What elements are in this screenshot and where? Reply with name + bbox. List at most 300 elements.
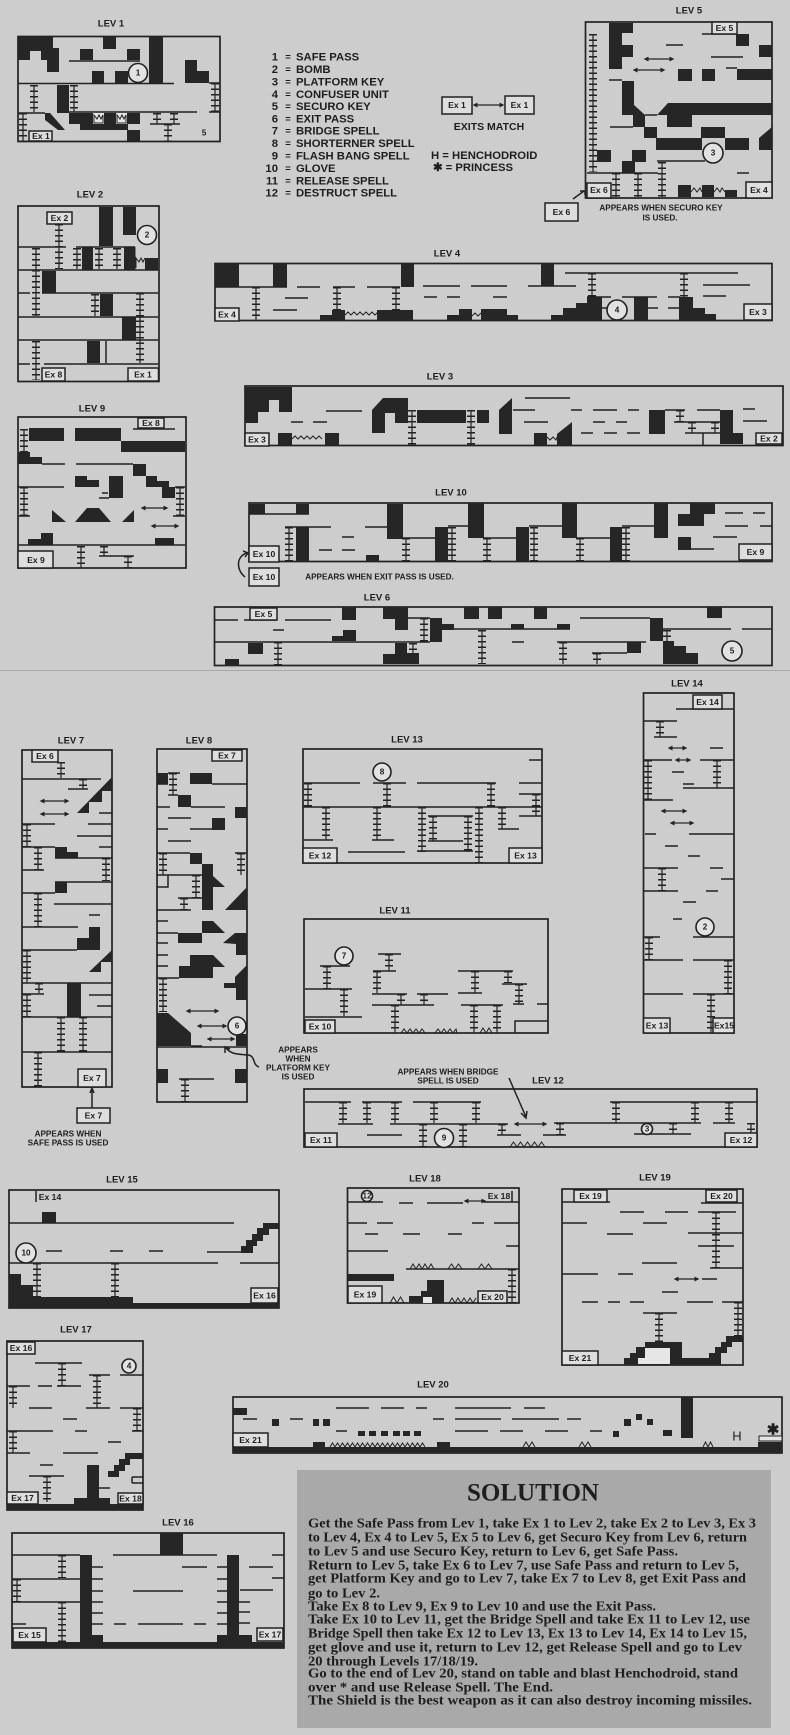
- exit: Ex 16: Ex 16: [10, 1343, 32, 1353]
- spikes: [345, 312, 481, 316]
- ladders: [278, 618, 667, 665]
- item 9 marker: 9: [442, 1134, 447, 1142]
- platforms: [9, 1191, 279, 1263]
- note: bridge spell: APPEARS WHEN BRIDGE: [398, 1068, 499, 1076]
- legend numbers: 11: [266, 175, 278, 187]
- moving platform arrows: [637, 59, 670, 70]
- ladders: [256, 273, 684, 321]
- platforms: [18, 247, 158, 364]
- item 8 marker: 8: [380, 768, 385, 776]
- exit sample left: Ex 1: [448, 100, 466, 110]
- exit: Ex 3: [744, 304, 772, 320]
- exit: Ex 5: [712, 22, 737, 34]
- curved pointer arrow: [225, 1047, 259, 1067]
- exit: Ex 13: [509, 848, 542, 863]
- level 3 frame: [245, 386, 783, 446]
- exit: Ex 18: Ex 18: [119, 1494, 142, 1504]
- solid blocks: [42, 207, 158, 363]
- panel: level 1 map: [18, 18, 220, 142]
- panel: level 16 map: [12, 1518, 284, 1648]
- exit: Ex 19: Ex 19: [354, 1290, 376, 1300]
- moving platform arrow: [678, 1278, 695, 1280]
- exit: Ex 7: Ex 7: [218, 750, 236, 760]
- exit: Ex 16: Ex 16: [253, 1290, 276, 1300]
- ladders: [27, 762, 106, 1087]
- legend numbers: 8: [272, 138, 278, 150]
- exit: Ex 17: [7, 1492, 38, 1504]
- item 2 marker: 2: [145, 230, 150, 240]
- exit label: Ex 18: Ex 18: [488, 1191, 510, 1201]
- henchodroid marker: H: [732, 1428, 742, 1444]
- note: securo key: IS USED.: [642, 214, 678, 222]
- item 3 marker: 3: [711, 148, 716, 158]
- level 5 frame: [586, 22, 772, 198]
- panel: level 4 map: [215, 248, 772, 321]
- key: henchodroid: H = HENCHODROID: [431, 150, 537, 162]
- solution walkthrough text: over * and use Release Spell. The End.: [308, 1680, 553, 1694]
- note: platform key: IS USED: [282, 1072, 314, 1082]
- legend equals signs: =: [285, 114, 291, 125]
- exit: Ex 17: Ex 17: [259, 1630, 281, 1640]
- legend equals signs: =: [285, 64, 291, 76]
- heading: LEV 15: LEV 15: [106, 1174, 139, 1186]
- level 1 frame: [18, 36, 220, 142]
- exit: Ex 8: [138, 418, 164, 428]
- platforms: [348, 1191, 519, 1269]
- solution walkthrough text: Take Ex 8 to Lev 9, Ex 9 to Lev 10 and use the Exit Pass.: [308, 1598, 656, 1614]
- exit: Ex 20: Ex 20: [710, 1191, 733, 1201]
- heading: LEV 16: LEV 16: [162, 1518, 194, 1528]
- heading: LEV 7: LEV 7: [58, 736, 84, 746]
- table: [759, 1436, 782, 1441]
- panel: level 2 map: [18, 190, 159, 382]
- solution heading: SOLUTION: [467, 1480, 599, 1506]
- item 6 marker: 6: [235, 1022, 240, 1030]
- solid blocks: [233, 1397, 782, 1453]
- heading: LEV 6: LEV 6: [364, 592, 390, 604]
- exit: Ex 13: Ex 13: [646, 1020, 668, 1030]
- exit: Ex 8: Ex 8: [45, 370, 63, 380]
- hidden exit box: Ex 7: [85, 1110, 103, 1120]
- platforms: [303, 760, 542, 852]
- legend item names: SECURO KEY: [296, 101, 371, 113]
- note: platform key: APPEARS: [278, 1046, 318, 1054]
- panel: level 8 map: [157, 736, 331, 1102]
- ladders: [343, 1102, 751, 1147]
- note: bridge spell: [398, 1068, 499, 1086]
- legend item names: GLOVE: [296, 163, 336, 175]
- exit: Ex 16: [7, 1342, 35, 1354]
- legend numbers: 7: [272, 126, 278, 138]
- exit: Ex 7: Ex 7: [83, 1073, 101, 1083]
- ladders: [593, 34, 662, 197]
- level 14 frame: [644, 693, 734, 1033]
- exit: Ex 21: [233, 1433, 268, 1447]
- panel: solution: [297, 1470, 771, 1728]
- exit: Ex 11: Ex 11: [310, 1135, 332, 1145]
- exit: Ex 6: [587, 183, 611, 198]
- exit: Ex 17: Ex 17: [11, 1493, 34, 1503]
- solid blocks: [597, 23, 772, 197]
- exit: Ex 20: Ex 20: [481, 1292, 504, 1302]
- legend equals signs: =: [285, 138, 291, 150]
- solution walkthrough text: Return to Lev 5, take Ex 6 to Lev 7, use Safe Pass and return to Lev 5,: [308, 1558, 739, 1572]
- legend numbers: 5: [272, 101, 278, 113]
- level 2 frame: [18, 206, 159, 382]
- page fold: [0, 670, 790, 672]
- exit: Ex 3: Ex 3: [749, 307, 767, 317]
- exit: Ex 6: Ex 6: [36, 751, 54, 761]
- heading: LEV 11: LEV 11: [379, 906, 411, 916]
- panel: level 19 map: [562, 1172, 743, 1365]
- heading: LEV 20: LEV 20: [417, 1380, 449, 1390]
- ladders: [659, 1212, 738, 1342]
- level 13 frame: [303, 749, 542, 863]
- exit: Ex 1: Ex 1: [32, 131, 50, 141]
- ladders: [412, 410, 715, 445]
- panel: level 9 map: [18, 404, 186, 568]
- spikes: [94, 115, 126, 123]
- exit: Ex 12: [303, 848, 337, 863]
- legend equals signs: =: [285, 89, 291, 100]
- exit: Ex 15: [13, 1628, 46, 1642]
- exit: Ex 16: [251, 1288, 278, 1303]
- exit: Ex 8: [42, 368, 65, 381]
- legend equals signs: [285, 52, 291, 199]
- exit: Ex 1: [128, 368, 158, 381]
- exit: Ex 5: Ex 5: [716, 23, 734, 33]
- exit: Ex 7: [212, 750, 242, 761]
- item 2 marker: [696, 918, 714, 936]
- solution walkthrough text: The Shield is the best weapon as it can also destroy incoming missiles.: [308, 1692, 752, 1708]
- pointer arrow: [90, 1088, 94, 1108]
- legend equals signs: =: [285, 151, 291, 162]
- exit: Ex 9: Ex 9: [27, 555, 45, 565]
- ladders: [17, 1555, 62, 1642]
- level 12 frame: [304, 1089, 757, 1147]
- ladders: [24, 429, 180, 568]
- exit: Ex 19: Ex 19: [579, 1191, 602, 1201]
- legend numbers: 2: [272, 64, 278, 76]
- item 2 marker: 2: [703, 922, 708, 932]
- level 4 frame: [215, 264, 772, 320]
- legend equals signs: =: [285, 188, 291, 199]
- solid blocks: [157, 773, 247, 1083]
- exit: Ex 12: Ex 12: [730, 1135, 752, 1145]
- exit: Ex 2: [47, 212, 72, 224]
- spikes: [401, 1028, 492, 1033]
- level 19 frame: [562, 1189, 743, 1365]
- item 5 stray label: 5: [202, 128, 207, 138]
- exit: Ex 15: Ex15: [714, 1020, 734, 1030]
- heading: LEV 3: LEV 3: [427, 372, 453, 382]
- ladders: [23, 83, 215, 141]
- exit: Ex 6: Ex 6: [590, 185, 608, 195]
- exit: Ex 20: [478, 1291, 507, 1303]
- heading: LEV 18: LEV 18: [409, 1174, 441, 1184]
- level 15 frame: [9, 1190, 279, 1308]
- level 16 frame: [12, 1533, 284, 1648]
- solution walkthrough text: Take Ex 10 to Lev 11, get the Bridge Spell and take Ex 11 to Lev 12, use: [308, 1612, 750, 1626]
- solution walkthrough text: [308, 1516, 756, 1708]
- panel: level 15 map: [9, 1174, 279, 1308]
- level 18 frame: [348, 1188, 519, 1303]
- item 9 marker: [434, 1128, 454, 1148]
- item 5 marker: [722, 641, 742, 661]
- exit: Ex 12: Ex 12: [309, 850, 331, 860]
- solid blocks: [18, 428, 185, 545]
- ladders: [13, 1363, 137, 1502]
- item 10 marker: 10: [21, 1248, 31, 1258]
- solid blocks: [55, 777, 112, 1017]
- exit: Ex 11: [305, 1133, 337, 1147]
- exit: Ex 4: Ex 4: [750, 185, 768, 195]
- exit: Ex 13: [644, 1018, 670, 1033]
- solution walkthrough text: to Lev 4, Ex 4 to Lev 5, Ex 5 to Lev 6, get Securo Key from Lev 6, return: [308, 1530, 748, 1544]
- legend item names: PLATFORM KEY: [296, 76, 385, 88]
- spikes: [510, 1142, 545, 1147]
- double arrow: [477, 104, 500, 106]
- exit sample right: Ex 1: [511, 100, 529, 110]
- ladders: [289, 527, 626, 562]
- panel: exits match key: [431, 96, 537, 174]
- ladders: [37, 1263, 115, 1297]
- legend item names: DESTRUCT SPELL: [296, 188, 397, 200]
- exit: Ex 4: Ex 4: [218, 310, 236, 320]
- solution walkthrough text: Bridge Spell then take Ex 12 to Lev 13, Ex 13 to Lev 14, Ex 14 to Lev 15,: [308, 1626, 747, 1640]
- panel: level 10 map: [238, 488, 772, 586]
- exit: Ex 4: [746, 182, 772, 198]
- legend numbers: [265, 52, 279, 200]
- ladders: [327, 954, 519, 1033]
- pointer arrow: [573, 191, 585, 199]
- solution walkthrough text: get Platform Key and go to Lev 7, take Ex 7 to Lev 8, get Exit Pass and: [308, 1570, 747, 1586]
- exit: Ex 2: Ex 2: [51, 213, 69, 223]
- exit: Ex 15: [713, 1018, 734, 1033]
- level 9 frame: [18, 417, 186, 568]
- legend item names: SHORTERNER SPELL: [296, 138, 415, 150]
- note: safe pass: SAFE PASS IS USED: [28, 1138, 108, 1148]
- level 17 frame: [7, 1341, 143, 1510]
- legend numbers: 9: [272, 150, 278, 162]
- item 4 marker: [122, 1359, 136, 1373]
- spikes: [691, 188, 725, 192]
- ladders: [36, 224, 140, 380]
- spikes: [136, 258, 145, 268]
- moving platform arrows: [44, 801, 65, 814]
- exit: Ex 9: Ex 9: [747, 547, 765, 557]
- panel: level 7 map: [22, 736, 112, 1148]
- note: securo key: [599, 204, 723, 222]
- heading: LEV 19: LEV 19: [639, 1172, 671, 1184]
- legend equals signs: =: [285, 164, 291, 174]
- solution walkthrough text: Go to the end of Lev 20, stand on table and blast Henchodroid, stand: [308, 1666, 739, 1680]
- legend item names: SAFE PASS: [296, 52, 360, 64]
- legend numbers: 1: [272, 52, 278, 64]
- hidden exit box: Ex 6: [553, 207, 571, 217]
- exit: Ex 14: [693, 695, 722, 709]
- solid blocks: [348, 1274, 444, 1303]
- item 4 marker: 4: [127, 1362, 132, 1370]
- legend item names: CONFUSER UNIT: [296, 89, 389, 101]
- exit: Ex 9: [18, 551, 53, 568]
- platforms: [291, 398, 767, 445]
- exit: Ex 21: Ex 21: [569, 1353, 591, 1363]
- pits with spikes: [93, 113, 127, 124]
- item 1 marker: [128, 64, 148, 82]
- solid blocks: [215, 264, 716, 321]
- solution walkthrough text: Get the Safe Pass from Lev 1, take Ex 1 to Lev 2, take Ex 2 to Lev 3, Ex 3: [308, 1516, 756, 1530]
- panel: level 12 map: [304, 1068, 757, 1148]
- platforms: [157, 773, 247, 1079]
- panel: level 20 map: [233, 1380, 782, 1453]
- heading: LEV 17: LEV 17: [60, 1324, 92, 1336]
- platforms: [305, 954, 548, 1033]
- legend item names: FLASH BANG SPELL: [296, 150, 410, 162]
- exit: Ex 3: Ex 3: [248, 434, 266, 444]
- panel: level 5 map: [545, 6, 772, 222]
- solid blocks: [7, 1453, 143, 1510]
- solid blocks: [225, 607, 722, 666]
- exit: Ex 10: Ex 10: [253, 549, 275, 559]
- level 20 frame: [233, 1397, 782, 1453]
- exit: Ex 21: [562, 1351, 598, 1365]
- solid blocks: [18, 37, 209, 141]
- platforms: [249, 513, 772, 550]
- exit: Ex 3: [245, 433, 269, 446]
- platforms: [18, 61, 220, 124]
- heading: LEV 9: LEV 9: [79, 404, 105, 414]
- exit: Ex 8: Ex 8: [142, 418, 160, 428]
- platforms: [7, 1363, 143, 1488]
- panel: item legend: [265, 52, 415, 200]
- note: exit pass: APPEARS WHEN EXIT PASS IS USED.: [305, 572, 454, 582]
- note: safe pass: [28, 1130, 108, 1148]
- exit: Ex 6: [32, 750, 58, 762]
- ladders: [308, 783, 536, 863]
- level 11 frame: [304, 919, 548, 1033]
- exit: Ex 7: [78, 1069, 106, 1087]
- hidden exit box: [249, 568, 279, 586]
- legend equals signs: =: [285, 176, 291, 187]
- caption: exits match: EXITS MATCH: [454, 121, 524, 133]
- platforms: [587, 34, 749, 173]
- exit label: Ex 14: Ex 14: [39, 1192, 61, 1202]
- exit: Ex 19: [348, 1286, 382, 1303]
- legend item names: [296, 52, 415, 200]
- legend numbers: 10: [265, 163, 278, 175]
- item 4 marker: 4: [615, 306, 620, 314]
- item 12 marker: [362, 1190, 372, 1202]
- legend item names: BOMB: [296, 64, 331, 76]
- level 7 frame: [22, 750, 112, 1087]
- arch opening: [638, 1348, 670, 1364]
- exit: Ex 20: [706, 1190, 737, 1202]
- heading: LEV 10: LEV 10: [435, 488, 467, 498]
- exit: Ex 2: [756, 433, 782, 444]
- legend equals signs: =: [285, 77, 291, 88]
- hidden exit box: Ex 10: [253, 572, 275, 582]
- note: bridge spell: SPELL IS USED: [417, 1076, 479, 1086]
- heading: LEV 1: LEV 1: [98, 18, 125, 30]
- platforms: [22, 779, 112, 1052]
- princess marker: ✱: [767, 1422, 780, 1438]
- solid blocks: [12, 1533, 284, 1648]
- panel: level 3 map: [245, 372, 783, 446]
- note: platform key: [266, 1046, 331, 1082]
- platforms: [643, 709, 734, 994]
- curved pointer arrow: [238, 551, 248, 577]
- item 5 marker: 5: [730, 646, 735, 656]
- key: princess: ✱ = PRINCESS: [433, 162, 514, 174]
- ladder: [511, 1269, 513, 1303]
- note: platform key: WHEN: [285, 1054, 311, 1064]
- item 10 marker: [16, 1243, 36, 1263]
- note: safe pass: APPEARS WHEN: [35, 1130, 102, 1138]
- legend numbers: 6: [272, 114, 278, 126]
- level 8 frame: [157, 749, 247, 1102]
- moving platform arrows: [190, 1011, 231, 1039]
- item 12 marker: 12: [362, 1192, 372, 1200]
- solution walkthrough text: get glove and use it, return to Lev 12, get Release Spell and go to Lev: [308, 1640, 742, 1654]
- panel: level 18 map: [348, 1174, 519, 1303]
- platforms: [243, 1408, 602, 1431]
- exit: Ex 14: Ex 14: [696, 697, 719, 707]
- exit: Ex 17: [257, 1628, 283, 1641]
- platforms: [562, 1202, 743, 1313]
- legend item names: BRIDGE SPELL: [296, 126, 380, 138]
- spikes: [390, 1264, 492, 1303]
- panel: level 13 map: [303, 734, 542, 863]
- platforms: [12, 1555, 284, 1624]
- legend equals signs: =: [285, 52, 291, 63]
- legend numbers: 3: [272, 76, 278, 88]
- legend item names: EXIT PASS: [296, 114, 355, 126]
- pointer arrow: [509, 1078, 527, 1118]
- moving platform arrow: [518, 1123, 543, 1125]
- level 10 frame: [249, 503, 772, 562]
- solid blocks: [245, 387, 743, 445]
- legend numbers: 4: [272, 89, 279, 101]
- legend equals signs: =: [285, 102, 291, 112]
- item 3 marker: [642, 1124, 652, 1134]
- platforms: [215, 273, 750, 310]
- solution background: [297, 1470, 771, 1728]
- spikes: [292, 436, 557, 440]
- item 8 marker: [373, 763, 391, 781]
- panel: level 14 map: [643, 678, 734, 1033]
- exit: Ex 9: [739, 544, 772, 560]
- item 7 marker: 7: [342, 952, 347, 960]
- exit: Ex 19: [574, 1190, 607, 1202]
- heading: LEV 2: LEV 2: [77, 190, 103, 200]
- exit: Ex 12: [725, 1133, 757, 1147]
- heading: LEV 4: LEV 4: [434, 248, 461, 260]
- legend item names: RELEASE SPELL: [296, 175, 389, 187]
- item 6 marker: [228, 1017, 246, 1035]
- ladders: [163, 773, 241, 1102]
- item 3 marker: 3: [645, 1124, 650, 1134]
- level 6 frame: [214, 607, 772, 666]
- notch in stair block: [423, 1297, 432, 1303]
- moving platform arrow: [468, 1200, 482, 1202]
- heading: LEV 8: LEV 8: [186, 736, 212, 746]
- moving platform arrows: [665, 748, 690, 823]
- panel: level 6 map: [214, 592, 772, 666]
- exit: Ex 4: [215, 308, 239, 321]
- solid blocks: [624, 1336, 743, 1365]
- solution walkthrough text: go to Lev 2.: [308, 1586, 380, 1600]
